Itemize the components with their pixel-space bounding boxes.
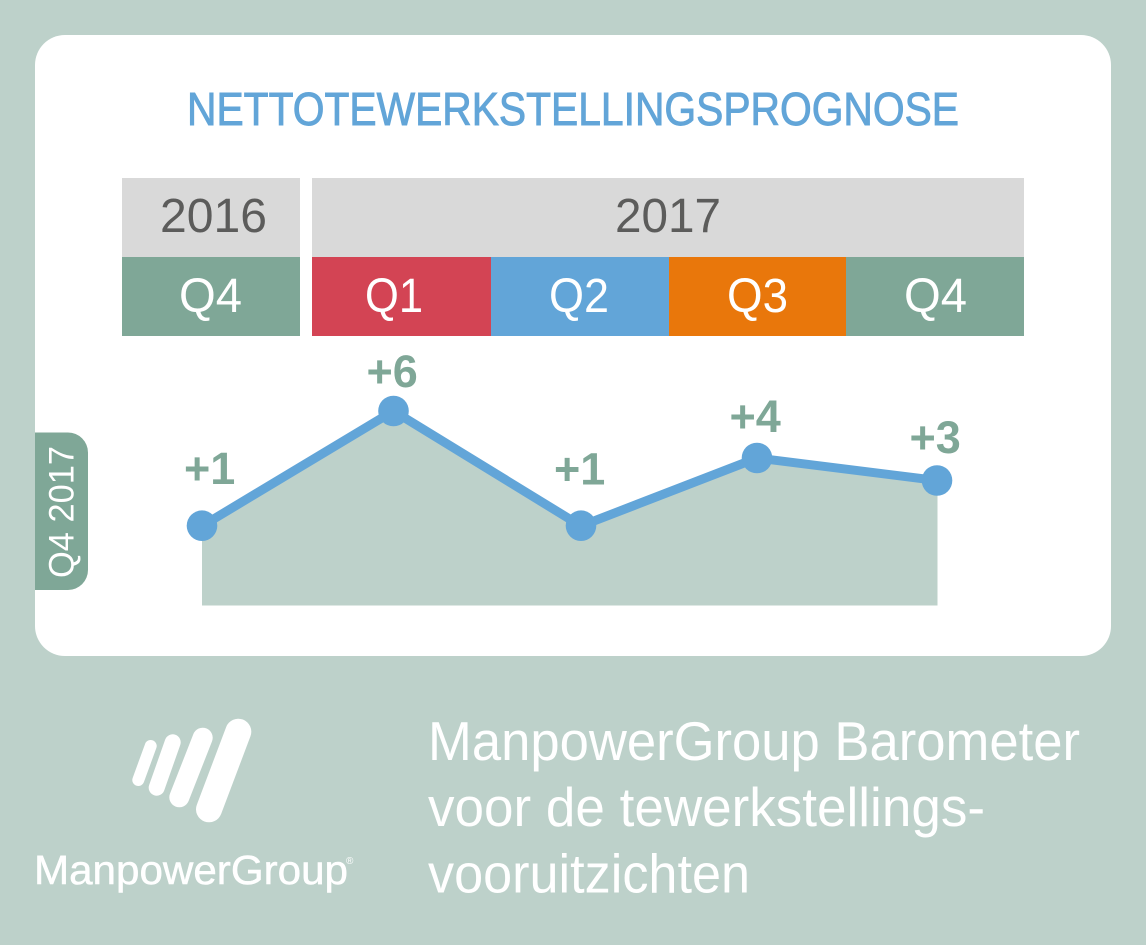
chart line — [202, 411, 937, 526]
quarter Q1 2017 — [312, 257, 491, 336]
year header 2016 — [122, 178, 300, 257]
data point Q2 2017: +1 — [554, 444, 605, 494]
data point Q4 2017 — [910, 412, 961, 496]
quarter Q4 2016: Q4 — [179, 270, 242, 323]
year header 2016: 2016 — [160, 190, 267, 243]
data point Q1 2017 — [366, 346, 418, 426]
side tab: Q4 2017: Q4 2017 — [42, 446, 82, 578]
panel: chart card — [35, 35, 1111, 656]
caption text — [428, 710, 1080, 904]
logo wordmark: ManpowerGroup — [34, 847, 348, 893]
caption text: voor de tewerkstellings- — [428, 776, 985, 838]
icon: ManpowerGroup logo mark — [138, 732, 238, 809]
caption text: vooruitzichten — [428, 842, 750, 904]
quarter Q4 2017: Q4 — [904, 270, 967, 323]
side tab: Q4 2017 — [35, 432, 88, 590]
year header 2017: 2017 — [615, 190, 721, 243]
quarter Q2 2017: Q2 — [549, 270, 609, 323]
data point Q4 2016: +1 — [184, 443, 235, 494]
title: NETTOTEWERKSTELLINGSPROGNOSE — [187, 83, 959, 135]
logo wordmark: ® — [346, 856, 354, 867]
quarter Q1 2017: Q1 — [365, 270, 423, 323]
data point Q3 2017: +4 — [730, 391, 781, 442]
quarter Q4 2017 — [846, 257, 1024, 336]
area and line chart — [184, 346, 961, 606]
quarter Q3 2017 — [669, 257, 846, 336]
quarter Q3 2017: Q3 — [727, 270, 788, 323]
data point Q2 2017 — [554, 444, 605, 541]
data point Q4 2016 — [184, 443, 235, 541]
caption text: ManpowerGroup Barometer — [428, 710, 1080, 772]
data point Q1 2017: +6 — [366, 346, 418, 397]
chart area — [202, 413, 938, 606]
data point Q4 2017: +3 — [910, 412, 961, 463]
quarter Q2 2017 — [491, 257, 669, 336]
quarter Q4 2016 — [122, 257, 300, 336]
data point Q3 2017 — [730, 391, 781, 473]
year header 2017 — [312, 178, 1024, 257]
